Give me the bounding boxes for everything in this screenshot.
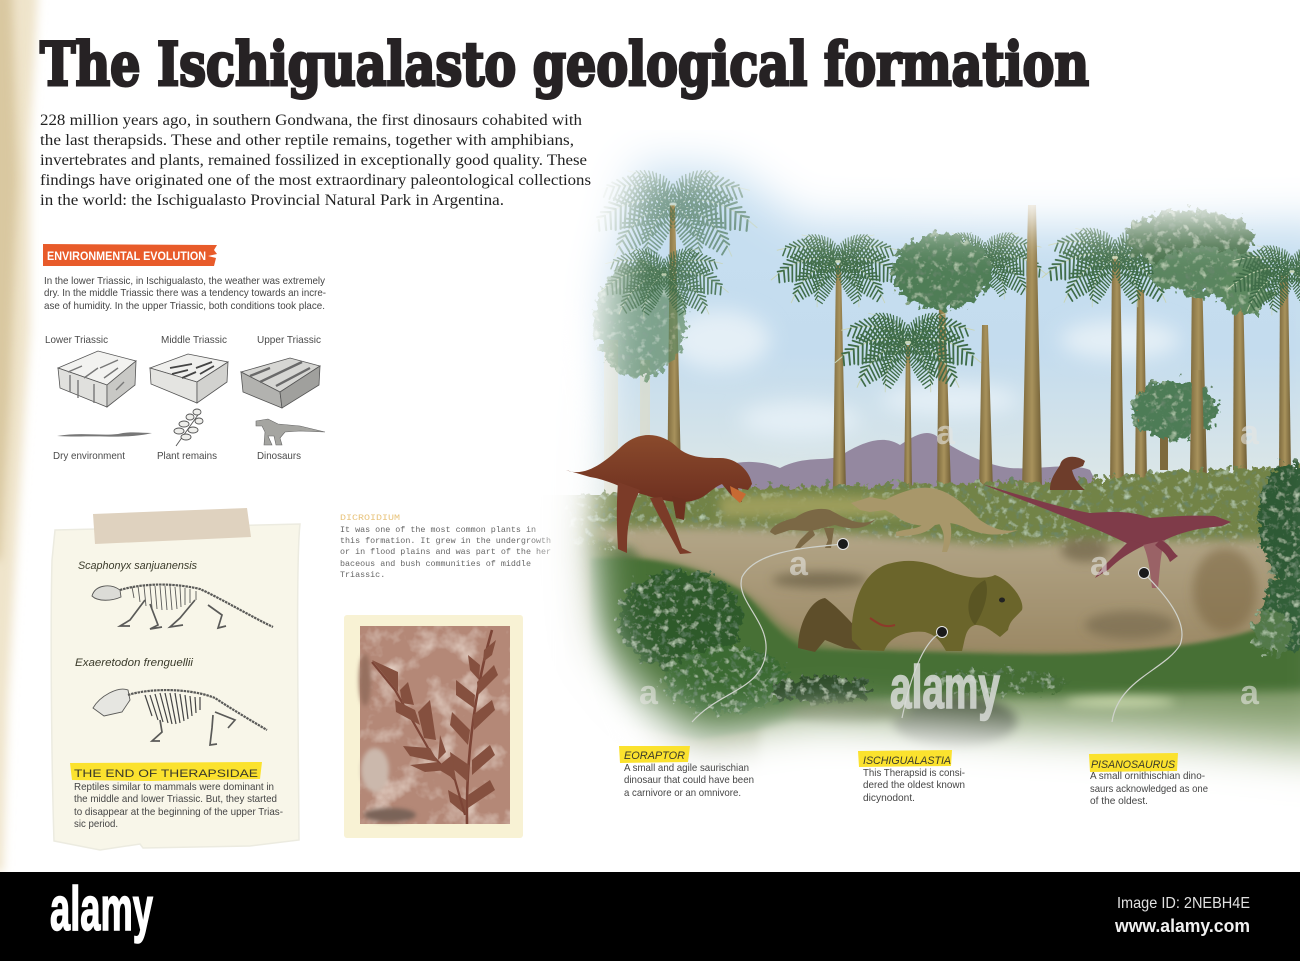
intro text block: invertebrates and plants, remained fossilized in exceptionally good quality. These — [40, 152, 587, 169]
icon labels: Plant remains — [157, 450, 217, 462]
logo: alamy: alamy — [50, 875, 153, 944]
image id: Image ID: 2NEBH4E — [1117, 895, 1250, 912]
dinosaur: tan predator — [851, 488, 1018, 552]
trunk: broad tree — [937, 300, 951, 490]
skeleton: Scaphonyx — [92, 585, 273, 629]
clouds — [670, 310, 1180, 438]
callout: ischigualastia: This Therapsid is consi- — [863, 767, 965, 779]
therapsid description: to disappear at the beginning of the upper Trias- — [74, 806, 283, 818]
intro text block: findings have originated one of the most extraordinary paleontological collections — [40, 172, 591, 189]
far-left faded trunks — [604, 352, 650, 495]
right jungle bush — [1252, 462, 1300, 654]
scene: Triassic landscape illustration — [564, 146, 1300, 780]
evolution description: In the lower Triassic, in Ischigualasto, the weather was extremely — [44, 275, 326, 287]
icon: lower Triassic block — [58, 351, 136, 407]
callout: eoraptor — [619, 746, 754, 799]
trunk: palm 1 — [668, 205, 680, 450]
icon labels: Dinosaurs — [257, 450, 301, 462]
evolution description — [44, 275, 326, 312]
period labels — [45, 334, 321, 346]
back vegetation band — [570, 462, 1300, 550]
rock patches — [359, 654, 416, 822]
therapsid description: sic period. — [74, 818, 118, 830]
foreground green bank — [590, 558, 1300, 740]
crown: palm 2 — [770, 234, 898, 308]
icon: dinosaur sketch — [256, 419, 325, 445]
dinosaur: small therapsid — [798, 598, 862, 652]
canopy: big tree — [1125, 210, 1270, 296]
trunk: thin — [1135, 290, 1147, 480]
watermark: small marks: a — [1240, 414, 1260, 452]
tree: small round — [1132, 370, 1218, 480]
canopy: round tree — [892, 234, 992, 310]
callout: ischigualastia: dicynodont. — [863, 792, 915, 804]
ground path — [590, 527, 1277, 658]
icon labels — [53, 450, 301, 462]
period labels: Lower Triassic — [45, 334, 108, 346]
ground shadows — [611, 538, 1257, 639]
callout: pisanosaurus: of the oldest. — [1090, 795, 1148, 807]
text block: dicroidium: this formation. It grew in the undergrowth — [340, 536, 551, 546]
watermark: small marks: a — [1090, 545, 1110, 583]
photo frame — [344, 615, 523, 838]
watermark: small marks: a — [639, 674, 659, 712]
callout: pisanosaurus: A small ornithischian dino- — [1090, 770, 1205, 782]
trunk: palm 5 — [1110, 255, 1124, 488]
dinosaur: ischigualastia — [852, 561, 1022, 651]
water pond — [758, 686, 1300, 782]
sky — [586, 146, 1300, 495]
intro text block — [40, 112, 591, 209]
crown: far right — [1227, 245, 1300, 316]
watermark: alamy centre: alamy — [890, 654, 1000, 721]
crown: palm 1 lower — [599, 248, 729, 318]
intro text block: the last therapsids. These and other reptile remains, together with amphibians, — [40, 132, 574, 149]
callout: eoraptor: a carnivore or an omnivore. — [624, 787, 741, 799]
paper sheet — [51, 524, 300, 850]
text block: dicroidium: Triassic. — [340, 570, 385, 580]
text block: dicroidium: or in flood plains and was part of the her — [340, 547, 551, 557]
dinosaur: background head — [1050, 457, 1085, 490]
intro text block: 228 million years ago, in southern Gondwana, the first dinosaurs cohabited with — [40, 112, 582, 129]
hills — [700, 433, 1100, 490]
therapsid description: Reptiles similar to mammals were dominant in — [74, 781, 274, 793]
canopy: right — [1219, 266, 1271, 314]
website: www.alamy.com — [1114, 916, 1250, 936]
text block: dicroidium: It was one of the most common plants in — [340, 525, 536, 535]
callout: pisanosaurus — [1089, 753, 1208, 807]
tape strip — [93, 508, 251, 544]
trunk: palm 2 — [833, 265, 846, 492]
dinosaur: large red predator — [566, 435, 752, 554]
crown: palm 4 — [952, 232, 1048, 300]
callout: ischigualastia: dered the oldest known — [863, 779, 965, 791]
leader line: pisanosaurus — [1112, 568, 1182, 722]
trunk: palm 3 — [904, 345, 912, 490]
therapsid description: the middle and lower Triassic. But, they started — [74, 793, 277, 805]
crown: palm 1 — [596, 170, 758, 262]
heading: the end of therapsidae: THE END OF THERAPSIDAE — [74, 768, 258, 780]
trunk: far right — [1279, 275, 1291, 470]
rock surface — [360, 626, 510, 824]
dinosaur: small eoraptor — [770, 509, 876, 548]
callout: pisanosaurus: PISANOSAURUS — [1091, 759, 1176, 771]
period labels: Upper Triassic — [257, 334, 321, 346]
icon: plant remains — [174, 409, 203, 446]
icon labels: Dry environment — [53, 450, 125, 462]
heading: the end of therapsidae — [70, 762, 262, 781]
callout: eoraptor: A small and agile saurischian — [624, 762, 749, 774]
dinosaur: pisanosaurus red runner — [982, 484, 1231, 588]
fern fronds — [372, 630, 498, 824]
watermark: small marks: a — [1240, 674, 1260, 712]
crown: palm 3 — [834, 312, 982, 392]
trunk: palm 4 — [979, 325, 993, 492]
dark foliage — [618, 570, 1070, 714]
footer bar — [0, 872, 1300, 961]
callout: ischigualastia — [858, 750, 965, 804]
callout: pisanosaurus: saurs acknowledged as one — [1090, 783, 1208, 795]
icon: middle Triassic block — [150, 354, 228, 403]
skeleton: Exaeretodon — [93, 689, 267, 745]
crown: palm 5 — [1042, 228, 1166, 308]
callout: eoraptor: EORAPTOR — [624, 750, 685, 762]
trunk: tall centre — [1022, 205, 1042, 490]
palm trees and trunks — [592, 170, 1300, 495]
panel: environmental evolution — [43, 244, 326, 462]
pale undergrowth — [720, 495, 940, 518]
photo: dicroidium fossil — [344, 615, 523, 838]
text block: dicroidium: DICROIDIUM — [340, 513, 400, 523]
tree: left faded canopy — [594, 262, 686, 378]
evolution description: ase of humidity. In the upper Triassic, both conditions took place. — [44, 300, 325, 312]
heading: environmental evolution: ENVIRONMENTAL EVOLUTION — [47, 251, 206, 263]
period labels: Middle Triassic — [161, 334, 227, 346]
watermark: small marks: a — [936, 414, 956, 452]
panel: paper note on therapsids — [51, 508, 300, 850]
leader line: ischigualastia — [902, 626, 948, 718]
text block: dicroidium — [340, 513, 551, 580]
trunk: right — [1233, 308, 1247, 470]
callout: ischigualastia: ISCHIGUALASTIA — [863, 755, 951, 767]
watermark: small marks: a — [789, 545, 809, 583]
species name: Exaeretodon frenguellii — [75, 657, 194, 669]
watermark: small marks — [639, 414, 1260, 712]
callout: eoraptor: dinosaur that could have been — [624, 774, 754, 786]
text block: dicroidium: baceous and bush communities of middle — [340, 559, 531, 569]
evolution description: dry. In the middle Triassic there was a tendency towards an incre- — [44, 287, 326, 299]
scene ground base — [564, 495, 1280, 766]
pond reflections — [790, 696, 1175, 748]
trunk: big tree — [1190, 289, 1207, 474]
icon: dry environment — [57, 432, 152, 437]
intro text block: in the world: the Ischigualasto Provincial Natural Park in Argentina. — [40, 192, 504, 209]
heading: environmental evolution — [43, 244, 217, 266]
fog over scene left side — [540, 260, 650, 760]
therapsid description — [74, 781, 283, 830]
icon: upper Triassic block — [241, 358, 320, 408]
leader line: eoraptor — [692, 538, 848, 722]
species name: Scaphonyx sanjuanensis — [78, 560, 197, 572]
parchment edge texture — [0, 0, 38, 872]
